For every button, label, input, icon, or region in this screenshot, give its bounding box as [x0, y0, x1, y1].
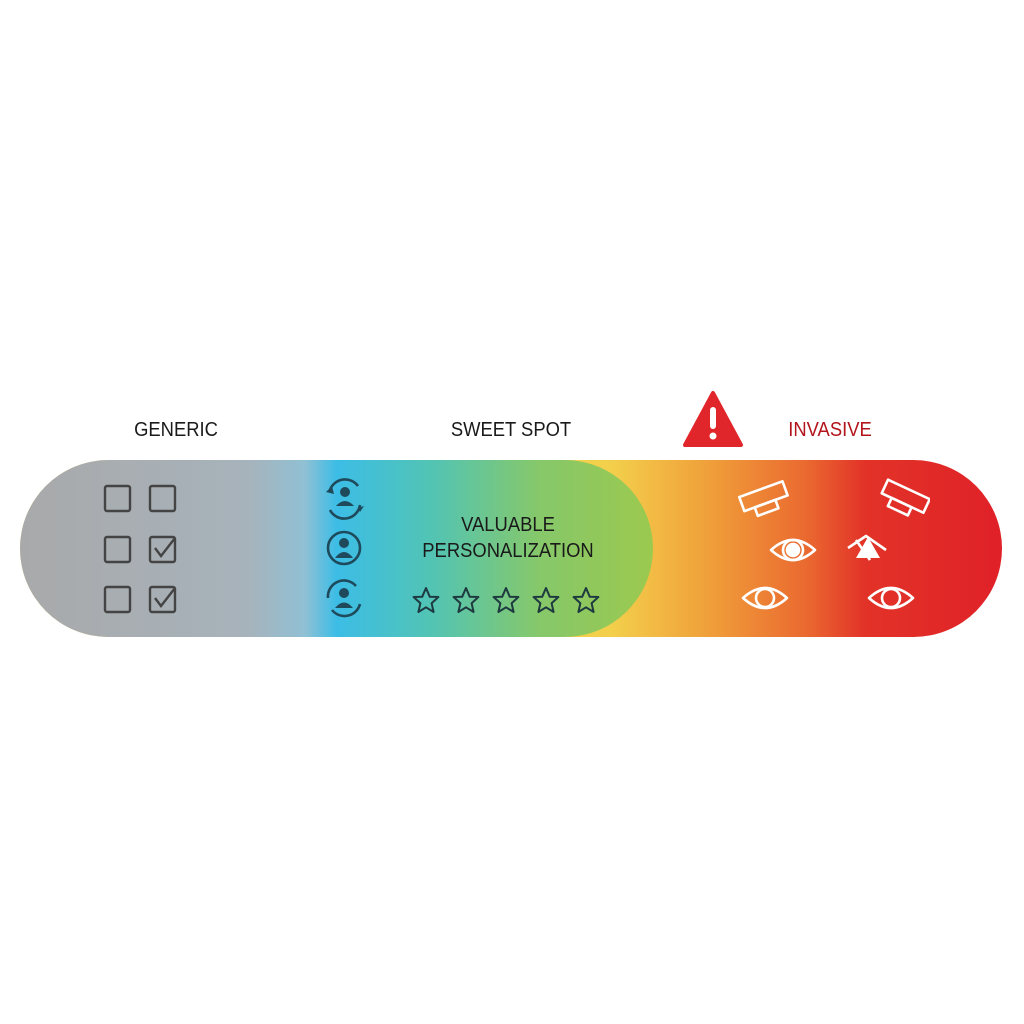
text: valuable personalization: VALUABLE — [461, 514, 555, 536]
label: generic: GENERIC — [134, 419, 218, 441]
label: invasive: INVASIVE — [788, 419, 872, 441]
text: valuable personalization: PERSONALIZATION — [422, 540, 594, 562]
label: sweet spot: SWEET SPOT — [451, 419, 571, 441]
icons: surveillance — [738, 478, 930, 610]
icon: warning triangle — [683, 390, 744, 447]
icons: user profiles — [326, 478, 364, 618]
checkbox grid — [104, 484, 176, 614]
text: valuable personalization — [422, 514, 594, 562]
stars — [412, 587, 600, 613]
